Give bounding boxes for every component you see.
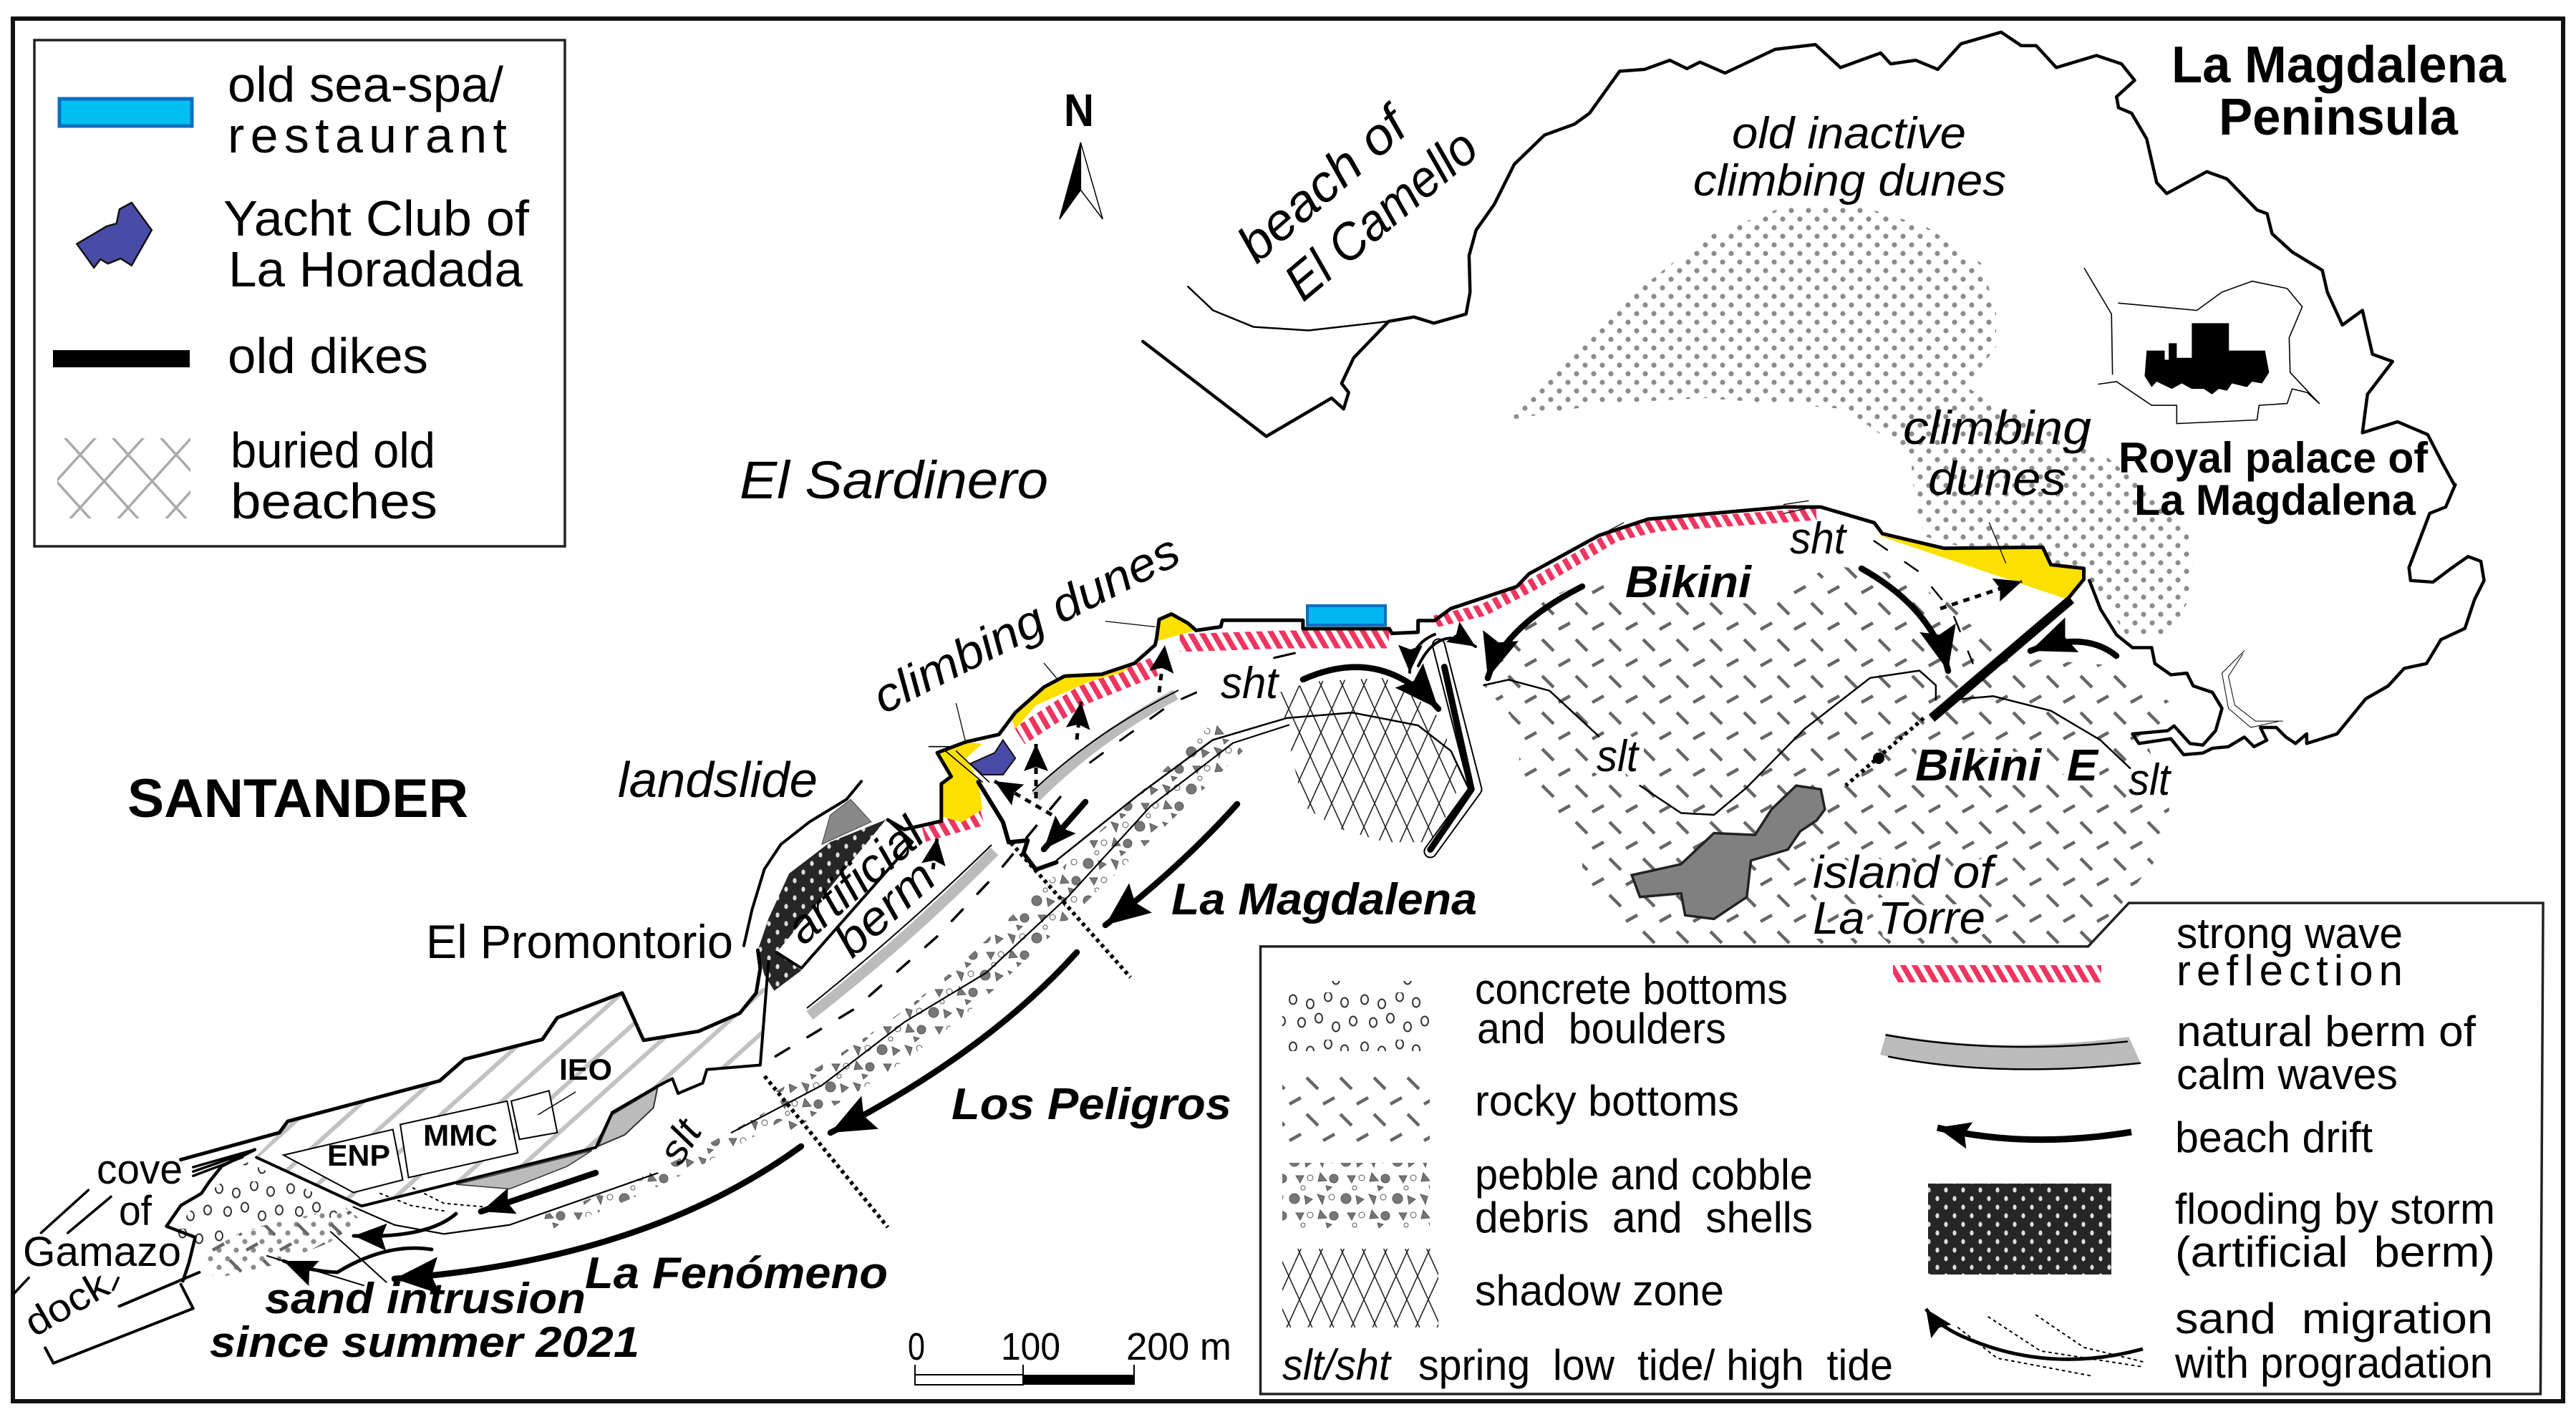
- place labels: Santander side: [17, 523, 1188, 1366]
- beach labels: La Magdalena: [1171, 875, 1477, 924]
- scale bar: 200 m: [1126, 1325, 1231, 1368]
- tide and island labels: sht: [1790, 514, 1848, 564]
- legend: old dikes: old dikes: [228, 328, 428, 384]
- central old dike with white edging: [1430, 645, 1476, 851]
- beach drift arrows: [284, 569, 2116, 1279]
- cove of Gamazo and dock outlines: [14, 1150, 493, 1363]
- place labels: Santander side: cove: [97, 1146, 183, 1193]
- place labels: north: climbing dunes: [1693, 156, 2006, 205]
- Bikini dike marker dot: [1873, 753, 1884, 764]
- beach labels: La Fenómeno: [585, 1249, 888, 1298]
- rocky bottoms area: [1483, 567, 2169, 944]
- place labels: north: La Magdalena: [2134, 476, 2416, 524]
- legend: buried old beaches: buried old: [231, 422, 435, 478]
- place labels: north: El Camello: [1274, 118, 1488, 311]
- scale bar: [908, 1325, 1231, 1385]
- wave dashed arrows toward coast: [933, 581, 2022, 869]
- place labels: Santander side: El Promontorio: [426, 915, 733, 968]
- legend: shadow zone: shadow zone: [1475, 1267, 1724, 1315]
- old dike at Yacht Club: [929, 747, 1057, 870]
- beach labels: Los Peligros: [952, 1080, 1231, 1129]
- legend: old dikes: [53, 328, 428, 384]
- landslide scar: [822, 799, 871, 844]
- legend: pebble and cobble debris and shells: [1282, 1151, 1813, 1242]
- island of La Torre: [1632, 785, 1825, 919]
- storm flooding strip at artificial berm: [758, 819, 886, 991]
- legend: beach drift: [1937, 1113, 2373, 1161]
- scale bar: 0: [908, 1325, 925, 1368]
- strong wave reflection bands on the coast: [924, 514, 1816, 833]
- dotted transects: [765, 718, 1924, 1227]
- legend panel: top left: [34, 40, 565, 546]
- legend: sand migration with progradation: with progradation: [2174, 1339, 2493, 1387]
- legend: Yacht Club: La Horadada: [228, 241, 523, 297]
- sht high tide dashed line: [768, 797, 1060, 1060]
- place labels: north: La Magdalena: [2171, 37, 2507, 94]
- place labels: Santander side: berm: [823, 849, 946, 967]
- place labels: Santander side: SANTANDER: [127, 768, 468, 829]
- tide and island labels: sht: [1221, 659, 1280, 708]
- legend: strong wave reflection: strong wave: [2176, 909, 2403, 957]
- place labels: Santander side: dock: [17, 1262, 117, 1345]
- legend: old sea-spa: restaurant: [228, 107, 507, 163]
- legend: natural berm of calm waves: calm waves: [2176, 1050, 2398, 1098]
- north arrow: N: [1064, 84, 1094, 136]
- debris band: pebbles, cobbles and shells: [544, 736, 1229, 1223]
- legend: buried old beaches: [57, 422, 437, 529]
- legend: Yacht Club: [77, 190, 530, 297]
- place labels: Santander side: MMC: [423, 1118, 498, 1152]
- legend: tide abbreviations: spring low tide/ high tide: [1418, 1341, 1893, 1389]
- place labels: north: old inactive: [1732, 109, 1966, 158]
- buildings ENP, MMC and IEO: [284, 1090, 576, 1192]
- beach labels: Bikini E: [1915, 741, 2099, 790]
- legend: old sea-spa: old sea-spa/: [228, 57, 504, 112]
- tide and island labels: slt: [1597, 732, 1640, 781]
- Santander coast outline: [181, 781, 912, 1206]
- Royal palace grounds and building: [2084, 269, 2319, 424]
- place labels: north: Royal palace of: [2119, 434, 2429, 482]
- sht dashes east and centre: [1081, 541, 1973, 769]
- legend: flooding by storm: flooding by storm: [2175, 1185, 2495, 1233]
- Bikini E old dike: [1932, 599, 2071, 718]
- legend: concrete bottoms: and boulders: [1477, 1005, 1726, 1053]
- legend: pebble and cobble debris and shells: pebble and cobble: [1475, 1151, 1813, 1199]
- place labels: north: dunes: [1928, 452, 2066, 505]
- beach labels: Bikini: [1625, 558, 1753, 607]
- tide and island labels: slt: [649, 1110, 711, 1171]
- legend: buried old beaches: beaches: [231, 473, 437, 529]
- legend: strong wave reflection: [1893, 909, 2403, 995]
- place labels: north: Peninsula: [2219, 89, 2459, 146]
- place labels: north: El Sardinero: [740, 450, 1048, 510]
- coastline: La Magdalena Peninsula south: [2089, 485, 2484, 755]
- legend: rocky bottoms: [1282, 1075, 1739, 1146]
- north arrow: [1060, 84, 1103, 219]
- legend: natural berm of calm waves: [1880, 1007, 2476, 1098]
- legend: flooding by storm: (artificial berm): [2175, 1228, 2495, 1276]
- dune stipple: old inactive and climbing dunes: [1514, 208, 2193, 634]
- legend: old sea-spa: [59, 57, 507, 163]
- cove of Gamazo bottoms: [168, 1162, 358, 1277]
- thin leader lines to dunes: [956, 500, 2005, 744]
- shadow zone: [1280, 677, 1457, 842]
- natural berm of calm waves: [807, 690, 1178, 1015]
- place labels: Santander side: Gamazo: [23, 1229, 181, 1275]
- old sea-spa building: [1307, 606, 1385, 625]
- grey berm lenses near IEO: [456, 1088, 657, 1189]
- legend: sand migration with progradation: sand migration: [2175, 1295, 2493, 1343]
- place labels: north: beach of: [1226, 93, 1422, 274]
- place labels: Santander side: since summer 2021: [210, 1318, 639, 1366]
- place labels: Santander side: landslide: [618, 752, 818, 808]
- tide and island labels: slt: [2129, 755, 2172, 805]
- place labels: Santander side: IEO: [559, 1053, 612, 1086]
- coastline: La Magdalena Peninsula north: [1143, 32, 2455, 485]
- place labels: Santander side: artificial: [775, 806, 935, 954]
- coastline: Santander to Bikini: [888, 507, 2084, 829]
- climbing dunes yellow deposits: [937, 536, 2084, 822]
- legend: flooding by storm: [1928, 1184, 2495, 1276]
- land hatching: Santander coast block: [255, 988, 765, 1199]
- legend: beach drift: beach drift: [2175, 1113, 2373, 1161]
- legend: Yacht Club: Yacht Club of: [223, 190, 530, 246]
- place labels: Santander side: sand intrusion: [265, 1275, 586, 1322]
- legend: rocky bottoms: rocky bottoms: [1475, 1077, 1739, 1125]
- tide and island labels: [649, 514, 2172, 1171]
- legend panel: bottom right: [1261, 903, 2543, 1394]
- legend: natural berm of calm waves: natural berm of: [2176, 1007, 2476, 1055]
- legend: tide abbreviations: slt/sht: [1282, 1341, 1392, 1389]
- beach labels: [585, 558, 2099, 1298]
- legend: concrete bottoms: concrete bottoms: [1475, 965, 1788, 1013]
- place labels: north: climbing: [1903, 401, 2091, 454]
- legend: sand migration with progradation: [1926, 1295, 2493, 1387]
- tide and island labels: island of: [1813, 846, 1998, 898]
- legend: shadow zone: [1282, 1249, 1724, 1327]
- Yacht Club of La Horadada: [970, 740, 1015, 775]
- place labels: north: [740, 37, 2507, 524]
- tide and island labels: La Torre: [1813, 892, 1985, 944]
- legend: pebble and cobble debris and shells: debris and shells: [1475, 1194, 1813, 1242]
- legend: strong wave reflection: reflection: [2176, 947, 2403, 995]
- beach of El Camello shoreline: [1188, 286, 1389, 331]
- place labels: Santander side: ENP: [327, 1138, 390, 1172]
- slt spring low tide lines: [354, 671, 2133, 1234]
- place labels: Santander side: climbing dunes: [864, 523, 1188, 723]
- scale bar: 100: [1001, 1325, 1060, 1368]
- legend: concrete bottoms: [1282, 965, 1788, 1053]
- place labels: Santander side: of: [119, 1188, 152, 1234]
